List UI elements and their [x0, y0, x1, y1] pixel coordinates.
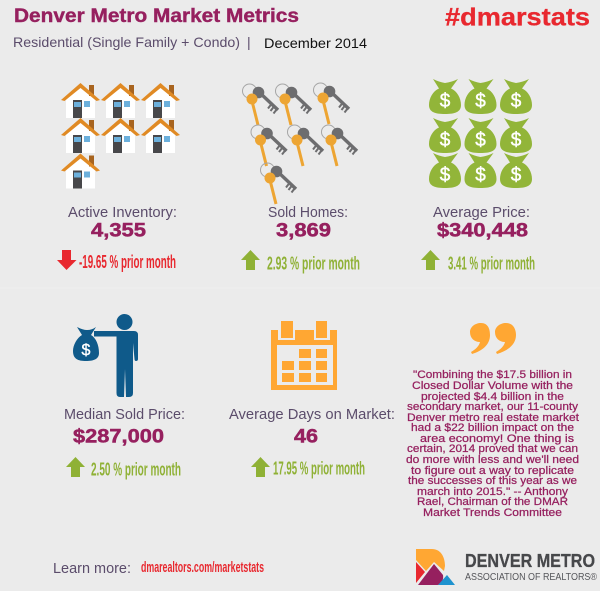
- icon: person holding money bag: [73, 314, 138, 397]
- panel: quote: [406, 323, 579, 519]
- value: 4,355: [91, 220, 146, 242]
- logo: [416, 549, 598, 585]
- value: 3,869: [276, 220, 331, 242]
- value: $287,000: [73, 426, 164, 448]
- quote text: to figure out a way to replicate: [411, 465, 574, 477]
- quote text: projected $4.4 billion in the: [421, 391, 564, 403]
- label: Average Price:: [433, 204, 530, 221]
- value: 46: [294, 426, 318, 448]
- quote text: secondary market, our 11-county: [407, 401, 579, 413]
- icon: houses: [61, 83, 180, 188]
- quote text: Market Trends Committee: [423, 507, 562, 519]
- subtitle separator: |: [247, 34, 251, 50]
- panel: average days on market: [229, 321, 395, 478]
- label: Active Inventory:: [68, 204, 177, 221]
- icon: up arrow: [421, 250, 440, 270]
- subtitle: Residential (Single Family + Condo): [13, 34, 240, 50]
- change: 2.93 % prior month: [267, 254, 360, 274]
- title: Denver Metro Market Metrics: [14, 6, 299, 27]
- quote text: Denver metro real estate market: [407, 412, 579, 424]
- value: $340,448: [437, 220, 528, 242]
- quote text: [406, 369, 579, 519]
- logo mark: [416, 549, 455, 585]
- change: -19.65 % prior month: [79, 252, 176, 272]
- quote text: certain, 2014 proved that we can: [407, 443, 578, 455]
- panel: median sold price: [64, 314, 185, 480]
- icon: person holding money bag: $: [82, 342, 91, 359]
- learn more label: Learn more:: [53, 560, 131, 577]
- hashtag: #dmarstats: [445, 4, 590, 32]
- label: Average Days on Market:: [229, 406, 395, 423]
- icon: up arrow: [66, 457, 85, 477]
- icon: down arrow: [57, 250, 76, 270]
- icon: calendar: [271, 321, 337, 390]
- quote text: area economy! One thing is: [420, 433, 575, 445]
- quote text: had a $22 billion impact on the: [411, 422, 574, 434]
- panel: active inventory: [57, 83, 180, 272]
- quote text: the successes of this year as we: [408, 475, 577, 487]
- learn more link: dmarealtors.com/marketstats: [141, 559, 264, 576]
- quote text: march into 2015." -- Anthony: [417, 486, 569, 498]
- label: Sold Homes:: [268, 204, 348, 221]
- icon: money bags: [429, 79, 532, 188]
- label: Median Sold Price:: [64, 406, 185, 423]
- icon: up arrow: [251, 457, 270, 477]
- icon: up arrow: [241, 250, 260, 270]
- change: 2.50 % prior month: [91, 460, 181, 480]
- date: December 2014: [264, 35, 367, 51]
- icon: keys: [242, 83, 357, 204]
- panel: sold homes: [241, 83, 360, 274]
- panel: average price: [421, 79, 535, 274]
- quote text: "Combining the $17.5 billion in: [413, 369, 572, 381]
- icon: quotation marks: [470, 323, 516, 354]
- quote text: Rael, Chairman of the DMAR: [417, 496, 568, 508]
- change: 17.95 % prior month: [273, 458, 365, 478]
- quote text: do more with less and we'll need: [406, 454, 579, 466]
- quote text: Closed Dollar Volume with the: [412, 380, 573, 392]
